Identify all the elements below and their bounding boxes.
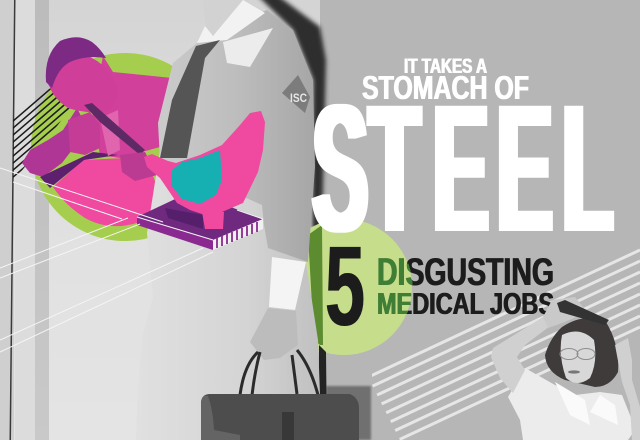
hair <box>545 318 618 387</box>
dark sleeve <box>22 108 88 177</box>
lips <box>568 370 580 374</box>
bag body <box>201 394 359 440</box>
text: disgusting: DISGUSTING <box>377 251 554 294</box>
dress <box>136 150 320 440</box>
hatched square <box>13 88 70 178</box>
heading: it takes a: IT TAKES A <box>404 55 487 78</box>
cuff <box>269 257 306 310</box>
white line grid <box>0 168 263 352</box>
diagonal white stripes <box>360 250 640 440</box>
hands <box>68 112 100 155</box>
hair <box>46 37 106 88</box>
numeral 5: 5 <box>325 223 365 349</box>
dark green shadow on circle <box>308 225 323 345</box>
platform <box>137 192 263 250</box>
sleeve badge <box>282 75 310 113</box>
text: medical jobs: MEDICAL JOBS <box>377 286 554 321</box>
heading: stomach of: STOMACH OF <box>362 69 529 106</box>
man with magnifier in magenta <box>22 37 172 188</box>
blouse collar <box>555 382 590 425</box>
lower jacket shadow <box>40 152 118 188</box>
bag clasp <box>282 412 294 440</box>
title: 5 disgusting medical jobs <box>325 223 554 349</box>
jacket <box>92 56 172 158</box>
right hand and forearm <box>615 338 640 440</box>
bag handles <box>240 350 320 440</box>
bag end panel <box>201 396 240 440</box>
instrument <box>84 103 145 155</box>
epaulette <box>223 28 273 67</box>
heading: steel: STEEL <box>312 68 613 271</box>
title: steel <box>312 55 613 271</box>
green circle behind title <box>276 219 412 355</box>
head <box>47 55 118 113</box>
neck <box>203 0 250 42</box>
bag shadow strip <box>318 345 327 440</box>
shirt front <box>100 110 120 156</box>
blouse <box>508 368 635 440</box>
tie <box>160 40 220 158</box>
face <box>561 331 595 383</box>
shadow behind nurse <box>257 0 371 440</box>
glasses <box>560 348 595 360</box>
woman adjusting hair <box>491 297 640 440</box>
collar <box>197 0 265 43</box>
platform striped side <box>213 219 263 250</box>
bedpan illustration <box>137 111 265 250</box>
large green circle <box>31 53 219 241</box>
pedestal shadow <box>165 208 203 229</box>
hand <box>250 308 298 360</box>
shirt <box>158 10 315 262</box>
raised arm <box>491 317 550 393</box>
pink table circle segment <box>53 157 165 226</box>
comb <box>557 300 609 325</box>
teal interior <box>171 150 222 204</box>
blouse collar right <box>590 395 618 425</box>
platform front side <box>137 217 213 250</box>
badge text: ISC <box>290 91 307 105</box>
doctor's bag <box>201 350 359 440</box>
pedestal <box>202 212 224 229</box>
hand on head <box>543 297 587 328</box>
second hand <box>120 152 157 181</box>
nurse figure <box>136 0 320 440</box>
platform top <box>137 192 263 240</box>
pink bowl <box>144 111 265 215</box>
